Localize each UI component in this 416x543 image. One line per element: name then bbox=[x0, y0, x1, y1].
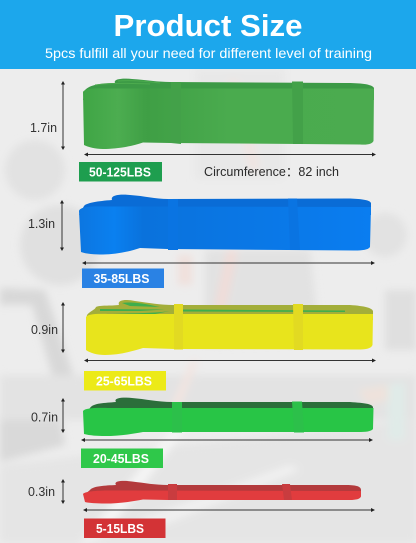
band: 50-125LBS dark green bbox=[83, 79, 374, 149]
arrow: circumference 5 bbox=[83, 508, 375, 512]
arrow: height 0.9in bbox=[61, 302, 65, 353]
arrow: height 1.3in bbox=[60, 200, 64, 251]
header banner bbox=[0, 0, 416, 69]
label: 0.3in: 0.3in bbox=[28, 484, 55, 499]
arrow: height 1.7in bbox=[61, 81, 65, 150]
tag: 50-125LBS bbox=[79, 162, 162, 182]
label: 1.7in: 1.7in bbox=[30, 120, 57, 135]
band: 25-65LBS yellow bbox=[86, 300, 373, 355]
tag: 25-65LBS: 25-65LBS bbox=[96, 374, 152, 388]
tag: 5-15LBS: 5-15LBS bbox=[96, 522, 144, 536]
label: 1.3in: 1.3in bbox=[28, 216, 55, 231]
tag: 5-15LBS bbox=[84, 518, 166, 538]
arrow: circumference 4 bbox=[81, 438, 373, 442]
circumference text: Circumference：82 inch bbox=[204, 165, 339, 179]
tag: 20-45LBS bbox=[81, 448, 163, 468]
band: 35-85LBS blue bbox=[79, 195, 371, 254]
tag: 20-45LBS: 20-45LBS bbox=[93, 452, 149, 466]
arrow: circumference 1 bbox=[84, 152, 376, 156]
title: Product Size bbox=[114, 8, 302, 43]
band: 5-15LBS red bbox=[83, 481, 361, 504]
arrow: height 0.7in bbox=[61, 398, 65, 433]
band: 20-45LBS bright green bbox=[83, 398, 374, 436]
label: 0.9in: 0.9in bbox=[31, 322, 58, 337]
tag: 25-65LBS bbox=[84, 371, 166, 390]
label: 0.7in: 0.7in bbox=[31, 410, 58, 424]
arrow: height 0.3in bbox=[61, 479, 65, 504]
arrow: circumference 3 bbox=[84, 358, 376, 362]
tag: 50-125LBS: 50-125LBS bbox=[89, 166, 151, 180]
subtitle: 5pcs fulfill all your need for different level of training bbox=[45, 45, 372, 61]
tag: 35-85LBS: 35-85LBS bbox=[94, 272, 150, 286]
arrow: circumference 2 bbox=[82, 261, 375, 265]
tag: 35-85LBS bbox=[82, 268, 164, 288]
